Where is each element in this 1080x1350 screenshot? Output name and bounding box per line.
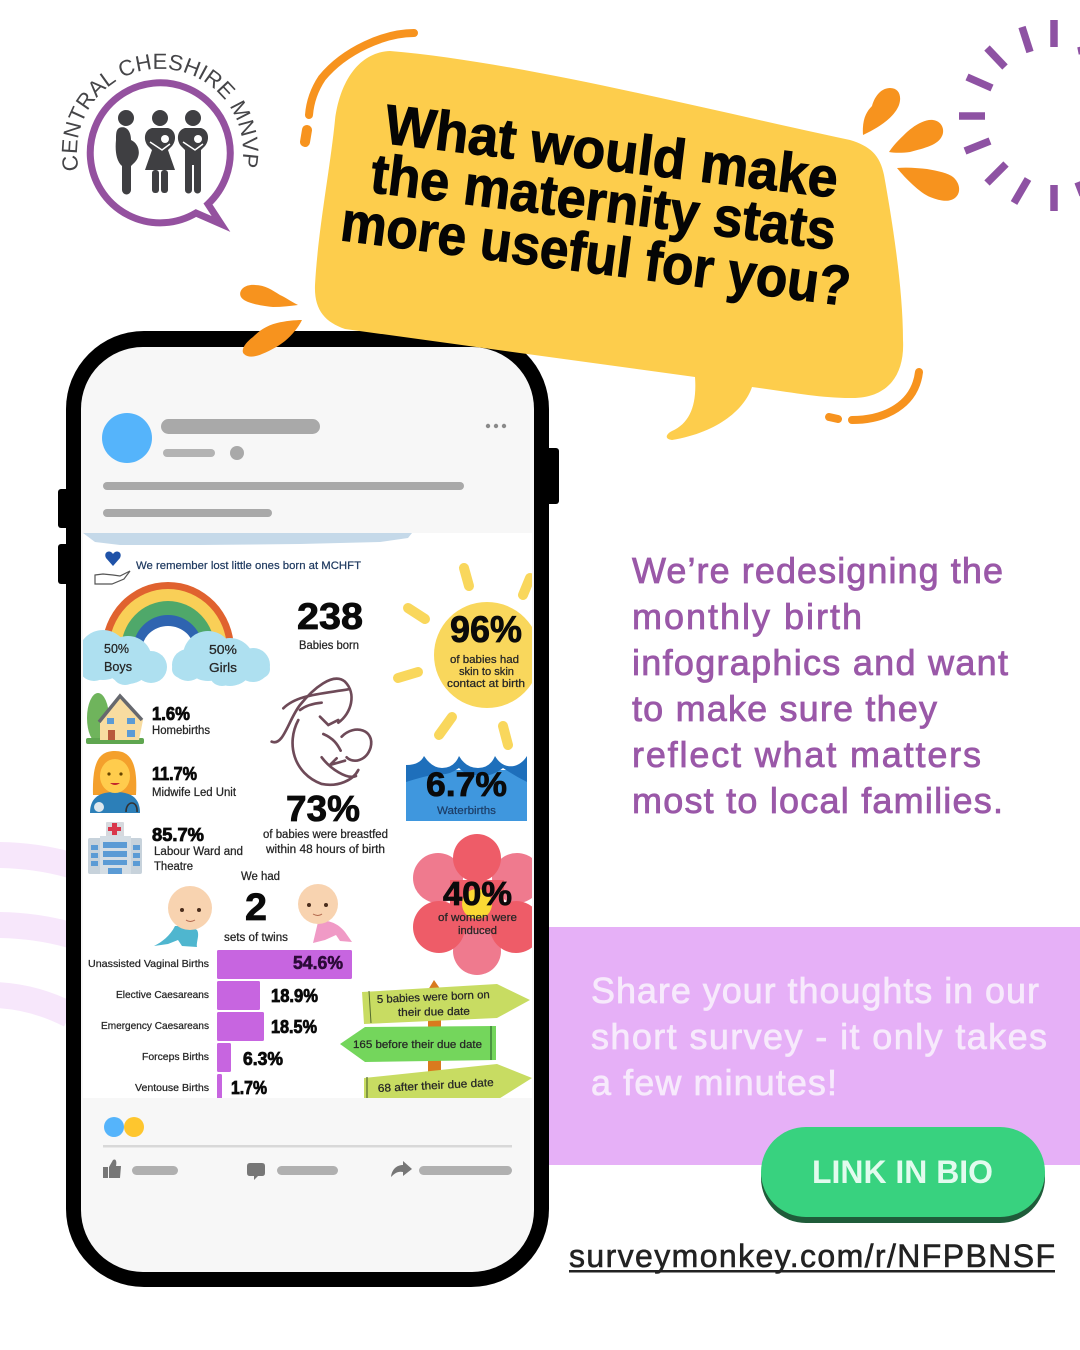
survey URL: surveymonkey.com/r/NFPBNSF <box>569 1238 1055 1274</box>
orange accent: lower right arc <box>829 372 919 420</box>
redesign message text: to make sure they <box>632 688 937 729</box>
water graphic <box>406 756 527 821</box>
remembrance line: We remember lost little ones born at MCHFT <box>136 560 361 572</box>
breastfed stat: of babies were breastfed <box>263 829 388 841</box>
redesign message text <box>632 550 1008 821</box>
icon: hospital <box>88 822 142 874</box>
survey prompt text <box>591 970 1047 1103</box>
logo curved name: CENTRAL CHESHIRE MNVP <box>62 54 258 170</box>
bar: elective caesareans <box>116 981 318 1010</box>
button: link in bio <box>761 1127 1045 1223</box>
survey prompt text: short survey - it only takes <box>591 1016 1047 1057</box>
logo ring with speech tail <box>90 83 230 224</box>
bar: unassisted vaginal births <box>88 950 352 979</box>
embedded birth infographic <box>78 533 542 1100</box>
logo: Central Cheshire MNVP <box>62 54 258 232</box>
babies born stat <box>298 602 362 650</box>
skin to skin stat <box>447 616 524 688</box>
skin to skin stat: contact at birth <box>447 678 525 690</box>
button: link in bio: LINK IN BIO <box>812 1154 993 1190</box>
sign: after due date: 68 after their due date <box>378 1077 494 1095</box>
bar: forceps births: Forceps Births <box>142 1051 209 1063</box>
bar: ventouse births: 1.7% <box>231 1078 267 1098</box>
heading line 3: more useful for you? <box>337 189 854 318</box>
heading line 1: What would make <box>382 92 842 210</box>
reaction dots <box>104 1117 144 1137</box>
bar: elective caesareans: Elective Caesareans <box>116 989 209 1001</box>
bar: emergency caesareans: Emergency Caesareans <box>101 1020 209 1032</box>
homebirths stat <box>152 706 210 734</box>
midwife unit stat <box>152 766 236 796</box>
bar: unassisted vaginal births: Unassisted Vaginal Births <box>88 958 209 970</box>
midwife unit stat: 11.7% <box>152 764 197 784</box>
purple burst ticks <box>959 20 1080 211</box>
boys share <box>104 641 132 674</box>
skin to skin stat: of babies had <box>450 654 519 666</box>
induced stat <box>438 881 517 934</box>
breastfed stat <box>263 795 388 854</box>
twins stat: We had <box>241 871 280 883</box>
labour ward stat <box>152 828 242 870</box>
panel: survey prompt <box>549 927 1080 1165</box>
twins stat: 2 <box>245 887 267 929</box>
induced stat: of women were <box>438 912 517 924</box>
signpost: due dates <box>340 980 532 1100</box>
bar: elective caesareans: 18.9% <box>271 986 318 1006</box>
twins stat: sets of twins <box>224 932 288 944</box>
labour ward stat: 85.7% <box>152 825 204 845</box>
phone mockup <box>58 331 559 1287</box>
bar: emergency caesareans: 18.5% <box>271 1017 317 1037</box>
cloud: girls <box>172 631 270 686</box>
icon: baby in pink <box>298 884 352 943</box>
logo figure: person holding baby <box>178 110 208 194</box>
babies born stat: Babies born <box>299 638 359 652</box>
sun graphic <box>398 568 540 745</box>
waterbirths stat: 6.7% <box>426 766 507 804</box>
induced stat: induced <box>458 925 497 937</box>
bar: ventouse births <box>135 1074 267 1100</box>
rainbow <box>104 582 233 642</box>
bar: emergency caesareans <box>101 1012 317 1041</box>
phone side buttons <box>58 448 559 584</box>
redesign message text: We’re redesigning the <box>632 550 1003 591</box>
homebirths stat: Homebirths <box>152 725 210 737</box>
redesign message text: monthly birth <box>632 596 862 637</box>
redesign message text: infographics and want <box>632 642 1008 683</box>
waterbirths stat <box>426 772 506 814</box>
girls share: Girls <box>209 660 238 675</box>
heading line 2: the maternity stats <box>368 141 840 262</box>
skin to skin stat: skin to skin <box>459 666 514 678</box>
sign: born on due date <box>362 984 530 1024</box>
torn banner strip <box>83 533 412 545</box>
boys share: Boys <box>104 659 132 674</box>
phone screen <box>81 347 534 1272</box>
post footer placeholder <box>103 1117 512 1180</box>
bar: ventouse births: Ventouse Births <box>135 1082 209 1094</box>
icon: midwife <box>90 751 140 813</box>
breastfed stat: 73% <box>286 788 360 829</box>
signpost pole <box>428 980 441 1072</box>
icon: baby in blue <box>154 886 212 947</box>
logo figure: pregnant person <box>116 110 139 194</box>
orange accent: top left arc <box>305 33 414 142</box>
induced stat: 40% <box>443 875 512 912</box>
girls share: 50% <box>209 642 237 657</box>
orange accent: right petals <box>863 88 959 201</box>
homebirths stat: 1.6% <box>152 704 190 724</box>
post header placeholder <box>102 413 506 517</box>
redesign message text: most to local families. <box>632 780 1003 821</box>
redesign message text: reflect what matters <box>632 734 981 775</box>
bubble shape <box>315 51 903 440</box>
icon: heart in hand <box>95 551 130 584</box>
labour ward stat: Labour Ward and <box>154 846 243 858</box>
icon: house <box>86 693 144 744</box>
girls share <box>209 644 237 672</box>
sign: born on due date: 5 babies were born on <box>377 989 490 1006</box>
babies born stat: 238 <box>297 596 363 637</box>
icon: breastfeeding line art <box>272 679 371 785</box>
bar: forceps births: 6.3% <box>243 1049 283 1069</box>
labour ward stat: Theatre <box>154 861 193 873</box>
logo figure: person in dress holding baby <box>145 110 175 193</box>
twins stat <box>224 871 288 944</box>
sign: born on due date: their due date <box>398 1006 470 1019</box>
decorative background waves <box>0 855 70 1015</box>
sign: before due date: 165 before their due date <box>353 1039 482 1051</box>
speech bubble with heading <box>315 51 903 440</box>
waterbirths stat: Waterbirths <box>437 805 497 817</box>
breastfed stat: within 48 hours of birth <box>265 844 385 856</box>
orange accent: left petals <box>240 285 302 357</box>
sign: before due date <box>340 1026 496 1062</box>
icon: like <box>103 1159 121 1178</box>
midwife unit stat: Midwife Led Unit <box>152 787 237 799</box>
icon: share <box>391 1161 412 1177</box>
cloud: boys <box>78 630 167 685</box>
boys share: 50% <box>104 641 129 656</box>
survey prompt text: Share your thoughts in our <box>591 970 1039 1011</box>
icon: comment <box>247 1163 265 1180</box>
phone body <box>66 331 549 1287</box>
bar chart: types of birth <box>88 950 352 1100</box>
bar: forceps births <box>142 1043 283 1072</box>
bar: unassisted vaginal births: 54.6% <box>293 953 343 973</box>
survey prompt text: a few minutes! <box>591 1062 837 1103</box>
flower graphic <box>413 834 542 975</box>
skin to skin stat: 96% <box>450 609 522 650</box>
sign: after due date <box>364 1064 532 1100</box>
